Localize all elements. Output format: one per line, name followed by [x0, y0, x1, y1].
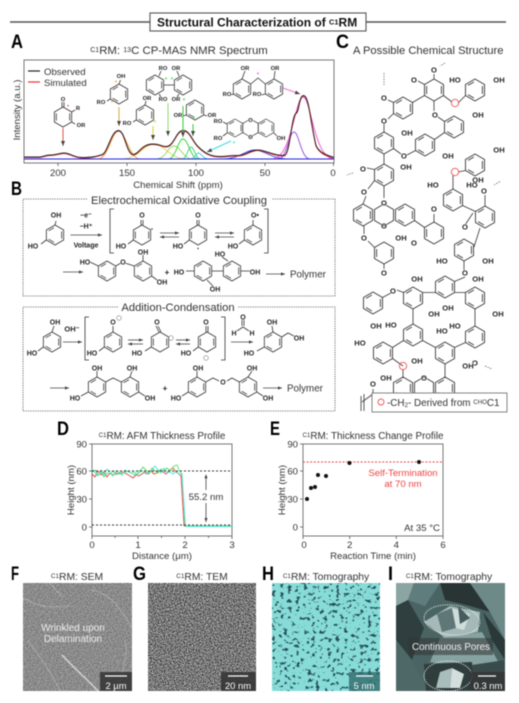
atom labels on the network: O	[370, 380, 376, 388]
scheme: addition-condensation: HO	[171, 396, 182, 402]
scheme: electrochemical oxidative coupling: Voltage	[74, 242, 98, 250]
panel label B: B	[11, 179, 22, 200]
molecule: aryl ether with arrow to 130 ppm: RO	[123, 121, 132, 127]
scale bar: 5 nm	[354, 680, 375, 691]
atom labels on the network: HO	[436, 326, 448, 336]
plot frame and axes: 50	[260, 168, 270, 179]
pore outlines	[423, 602, 481, 691]
plot frame and axes: Height (nm)	[277, 465, 288, 515]
molecule: aryl ether with arrow to 130 ppm: *	[154, 120, 157, 127]
molecule: dioxin with arrow to 98 ppm: RO	[214, 136, 223, 142]
molecule: diphenylmethane with arrow to 22 ppm: RO	[223, 92, 232, 98]
thickness annotation	[188, 475, 224, 522]
molecule: dioxin with arrow to 98 ppm: O	[248, 118, 253, 124]
atom labels on the network: OH	[442, 304, 454, 312]
overlay text: Continuous Pores	[412, 642, 490, 653]
polymer network skeleton	[347, 63, 501, 399]
scheme: electrochemical oxidative coupling: Electrochemical Oxidative Coupling	[91, 195, 267, 207]
plot frame and axes: 0	[330, 168, 336, 179]
molecule: biaryl with arrow to 115 ppm: RO	[159, 66, 168, 72]
plot frame and axes: 30	[76, 494, 87, 506]
scheme: electrochemical oxidative coupling: −H⁺	[80, 224, 93, 230]
scheme: addition-condensation	[23, 302, 335, 411]
panel C: chemical structure	[336, 32, 507, 412]
plot frame and axes: Distance (μm)	[132, 551, 192, 562]
molecule: biaryl with arrow to 115 ppm: OR	[172, 66, 181, 72]
scheme: electrochemical oxidative coupling: HO	[174, 270, 185, 276]
atom labels on the network: O	[421, 374, 427, 382]
atom labels on the network: O	[401, 152, 407, 160]
atom labels on the network: O	[431, 66, 437, 74]
molecule: dioxin with arrow to 98 ppm: RO	[214, 119, 223, 125]
annotation: self-termination: Self-Termination	[368, 468, 438, 479]
panel H: tomography slice	[262, 564, 380, 691]
plot frame and axes: 2	[347, 540, 352, 551]
atom labels on the network: HO	[427, 180, 439, 190]
atom labels on the network: O	[472, 358, 478, 368]
atom labels on the network: O	[432, 110, 438, 120]
scheme: electrochemical oxidative coupling: HO	[28, 244, 39, 250]
molecule: quinone with arrow to 197 ppm: O	[61, 97, 66, 103]
annotation: self-termination	[368, 468, 438, 490]
scheme: addition-condensation: HO	[181, 350, 192, 358]
TEM micrograph	[148, 583, 256, 691]
scheme: electrochemical oxidative coupling	[23, 195, 335, 296]
scheme: electrochemical oxidative coupling: O	[120, 260, 126, 266]
atom labels on the network: O	[360, 164, 366, 174]
plot frame and axes: Chemical Shift (ppm)	[133, 180, 223, 191]
scheme: addition-condensation: OH	[193, 366, 203, 372]
molecule: dioxin with arrow to 98 ppm	[207, 118, 285, 152]
molecule: diphenylmethane with arrow to 22 ppm	[223, 66, 300, 99]
plot frame and axes: Height (nm)	[66, 465, 77, 515]
atom labels on the network: OH	[493, 146, 505, 154]
plot frame and axes: Intensity (a.u.)	[12, 80, 23, 140]
overlay text	[41, 623, 105, 645]
scheme: electrochemical oxidative coupling: HO	[173, 244, 184, 250]
plot frame and axes	[66, 440, 235, 562]
scale bar: 0.3 nm	[474, 680, 503, 691]
scheme: addition-condensation: Polymer	[287, 384, 324, 394]
legend: -CH2- Derived from CHOC1	[387, 398, 500, 409]
molecule: resorcinol ether with arrows to 109 and 103 ppm: *	[183, 98, 186, 105]
panel label E: E	[270, 419, 280, 440]
height traces	[92, 465, 232, 526]
scheme: electrochemical oxidative coupling: HO	[116, 244, 127, 250]
molecule: aryl ether with arrow to 130 ppm	[123, 96, 157, 140]
atom labels on the network: OH	[493, 76, 505, 84]
spectrum legend	[28, 67, 87, 89]
panel label C: C	[336, 32, 349, 53]
atom labels on the network: O	[381, 198, 387, 208]
panel label H: H	[262, 564, 274, 585]
molecule: quinone with arrow to 197 ppm: R	[76, 106, 81, 112]
observed and simulated spectrum traces	[24, 96, 334, 158]
molecule: biaryl with arrow to 115 ppm: OR	[172, 97, 181, 103]
panel E heading: C1RM: Thickness Change Profile	[302, 431, 444, 442]
scheme: electrochemical oxidative coupling: OH	[138, 250, 148, 256]
atom labels on the network: OH	[411, 274, 423, 284]
plot frame and axes: 200	[50, 168, 66, 179]
overlay text: Wrinkled upon	[41, 623, 105, 634]
scheme: addition-condensation: OH	[267, 320, 277, 326]
atom labels on the network: OH	[370, 322, 382, 330]
scheme: addition-condensation: OH	[247, 366, 257, 372]
atom labels on the network: O	[462, 268, 468, 278]
molecule: quinone with arrow to 197 ppm	[54, 97, 86, 146]
atom labels on the network: O	[381, 268, 387, 278]
atom labels on the network: O	[411, 238, 417, 248]
atom labels on the network: OH	[472, 274, 484, 284]
scheme: electrochemical oxidative coupling: HO	[228, 244, 239, 250]
scheme: addition-condensation: O	[220, 380, 226, 386]
molecule: biaryl with arrow to 115 ppm: *	[165, 77, 168, 84]
panel E: thickness change profile	[270, 419, 446, 562]
molecule: diphenylmethane with arrow to 22 ppm: OR	[271, 66, 280, 72]
plot frame and axes: 60	[287, 466, 298, 478]
panel B: reaction schemes	[11, 179, 335, 411]
scheme: addition-condensation: H	[231, 330, 237, 338]
molecule: diphenylmethane with arrow to 22 ppm: *	[257, 72, 260, 79]
atom labels on the network: O	[381, 222, 387, 230]
atom labels on the network: OH	[411, 356, 423, 366]
plot frame and axes: 6	[440, 540, 446, 551]
atom labels on the network: HO	[449, 322, 461, 330]
atom labels on the network: OH	[472, 176, 484, 184]
reference levels	[92, 471, 232, 525]
scheme: electrochemical oxidative coupling: O•	[251, 212, 259, 220]
atom labels on the network: OH	[380, 374, 392, 382]
panel G heading: C1RM: TEM	[176, 572, 228, 583]
atom labels on the network: OH	[462, 362, 474, 370]
atom labels on the network: O	[381, 94, 387, 102]
scheme: addition-condensation: HO	[27, 350, 38, 358]
scheme: addition-condensation: OH	[145, 396, 155, 402]
scheme: addition-condensation: HO	[132, 350, 143, 358]
plot frame and axes: 1	[135, 540, 141, 551]
scheme: electrochemical oxidative coupling: −e⁻	[80, 212, 92, 220]
scheme: electrochemical oxidative coupling: OH	[157, 280, 167, 286]
molecule: resorcinol ether with arrows to 109 and 103 ppm: OR	[208, 113, 217, 119]
molecule: dioxin with arrow to 98 ppm: *	[233, 141, 236, 148]
molecule: biaryl with arrow to 115 ppm: *	[171, 77, 174, 84]
data points	[305, 460, 421, 501]
scheme: addition-condensation: +	[163, 384, 168, 393]
scheme: addition-condensation: O	[110, 320, 116, 326]
scheme: addition-condensation: OH	[127, 366, 137, 372]
molecule: phenol with arrow to 156 ppm: RO	[97, 100, 106, 106]
molecule: quinone with arrow to 197 ppm: OR	[77, 123, 86, 129]
panel label G: G	[133, 564, 146, 585]
panel A: NMR spectrum	[11, 32, 336, 191]
molecule: biaryl with arrow to 115 ppm	[146, 66, 192, 136]
panel G: TEM image	[133, 564, 256, 691]
scheme: addition-condensation: OH	[92, 366, 102, 372]
atom labels on the network: HO	[466, 180, 478, 190]
atom labels on the network: HO	[449, 76, 461, 84]
molecule: resorcinol ether with arrows to 109 and 103 ppm: *	[193, 116, 196, 123]
panel D: AFM thickness profile	[57, 419, 235, 562]
atom labels on the network: OH	[492, 310, 504, 318]
title: Structural Characterization of C1RM	[157, 16, 357, 30]
molecule: aryl ether with arrow to 130 ppm: OR	[143, 96, 152, 102]
plot frame and axes	[277, 440, 446, 562]
plot frame and axes: 30	[287, 494, 298, 506]
atom labels on the network: OH	[401, 128, 413, 138]
vinyl fragment at the lower edge	[361, 389, 373, 411]
scheme: electrochemical oxidative coupling: OH	[250, 270, 260, 276]
scale bar: 2 µm	[105, 680, 127, 691]
molecule: dioxin with arrow to 98 ppm: OH	[277, 136, 285, 142]
atom labels on the network: OH	[395, 234, 407, 242]
plot frame and axes: 0	[82, 522, 87, 534]
plot frame and axes: 2	[182, 540, 188, 551]
panel H heading: C1RM: Tomography	[283, 572, 370, 583]
panel I: tomography pore rendering	[388, 564, 505, 691]
plot frame and axes: 90	[76, 440, 87, 450]
scheme: electrochemical oxidative coupling: HO	[80, 260, 91, 266]
plot frame and axes: 0	[89, 540, 95, 551]
scheme: electrochemical oxidative coupling: O	[195, 212, 201, 220]
atom labels on the network: O	[361, 234, 367, 242]
scheme: addition-condensation: OH	[263, 396, 273, 402]
scheme: addition-condensation: O	[203, 320, 209, 326]
plot frame and axes: 3	[229, 540, 235, 551]
atom labels on the network: O	[462, 222, 468, 232]
molecule: diphenylmethane with arrow to 22 ppm: OR	[241, 66, 250, 72]
molecule: resorcinol ether with arrows to 109 and 103 ppm: OR	[174, 113, 183, 119]
3D pore render	[396, 583, 505, 691]
scheme: electrochemical oxidative coupling: Polymer	[290, 270, 327, 280]
scheme: addition-condensation: H	[249, 330, 255, 338]
scheme: electrochemical oxidative coupling: OH	[51, 212, 61, 220]
annotation: self-termination: at 70 nm	[384, 479, 422, 490]
atom labels on the network: OH	[400, 162, 412, 172]
title	[10, 13, 506, 31]
panel I heading: C1RM: Tomography	[406, 572, 493, 583]
molecule: dioxin with arrow to 98 ppm: O	[248, 135, 253, 141]
scheme: addition-condensation: OH	[50, 320, 60, 326]
atom labels on the network: O	[361, 188, 367, 196]
scheme: electrochemical oxidative coupling: OH	[210, 286, 220, 294]
SEM micrograph	[23, 583, 132, 691]
plot frame and axes: 4	[394, 540, 400, 551]
scheme: electrochemical oxidative coupling: O	[139, 212, 145, 220]
tomography image	[272, 583, 380, 691]
scheme: addition-condensation: O	[240, 314, 246, 322]
scheme: addition-condensation: HO	[70, 396, 81, 402]
panel F: SEM image	[11, 564, 132, 691]
plot frame and axes: 100	[188, 168, 204, 179]
atom labels on the network: HO	[354, 338, 366, 348]
scheme: electrochemical oxidative coupling: +	[165, 268, 170, 277]
molecule: phenol with arrow to 156 ppm: *	[111, 100, 114, 107]
atom labels on the network: OH	[472, 110, 484, 120]
atom labels on the network: HO	[436, 256, 448, 266]
red markers for -CH2- positions	[399, 99, 459, 370]
panel label D: D	[57, 419, 69, 440]
panel label A: A	[11, 32, 23, 53]
spectrum legend: Simulated	[44, 78, 87, 89]
atom labels on the network	[354, 66, 505, 388]
atom labels on the network: HO	[385, 320, 397, 330]
plot frame and axes: Reaction Time (min)	[330, 551, 416, 562]
plot frame and axes: 0	[301, 540, 307, 551]
molecule: phenol with arrow to 156 ppm: *	[115, 80, 118, 87]
atom labels on the network: O	[381, 116, 387, 126]
scheme: addition-condensation: Addition-Condensation	[121, 302, 235, 314]
atom labels on the network: OH	[442, 152, 454, 160]
panel D heading: C1RM: AFM Thickness Profile	[99, 431, 226, 442]
panel C heading: A Possible Chemical Structure	[353, 45, 503, 57]
self-termination line	[303, 461, 443, 463]
atom labels on the network: OH	[428, 310, 440, 318]
panel F heading: C1RM: SEM	[51, 572, 103, 583]
plot frame and axes: 60	[76, 466, 87, 478]
molecule: phenol with arrow to 156 ppm: OH	[117, 74, 125, 80]
scale bar: 20 nm	[225, 680, 251, 691]
plot frame and axes: 90	[287, 440, 298, 450]
atom labels on the network: O	[481, 186, 487, 196]
atom labels on the network: OH	[482, 256, 494, 266]
overlay text: Delamination	[44, 634, 102, 645]
plot frame and axes	[12, 60, 336, 191]
thickness annotation: 55.2 nm	[189, 492, 223, 503]
scheme: addition-condensation: OH⁻	[64, 324, 80, 334]
fitted component curves	[24, 97, 334, 159]
scheme: addition-condensation: O	[154, 320, 160, 326]
legend	[372, 393, 507, 412]
atom labels on the network: O	[411, 76, 417, 84]
atom labels on the network: O	[390, 286, 396, 296]
spectrum legend: Observed	[44, 67, 86, 78]
scheme: addition-condensation: OH	[294, 336, 304, 342]
molecule: diphenylmethane with arrow to 22 ppm: RO	[253, 92, 262, 98]
molecule: phenol with arrow to 156 ppm	[97, 74, 128, 126]
scheme: electrochemical oxidative coupling: HO	[215, 252, 226, 258]
plot frame and axes: 150	[119, 168, 135, 179]
annotation: temperature: At 35 °C	[404, 523, 440, 534]
molecule: resorcinol ether with arrows to 109 and 103 ppm	[174, 98, 217, 137]
panel label I: I	[388, 564, 393, 585]
panel A heading: C1RM: 13C CP-MAS NMR Spectrum	[90, 45, 268, 57]
molecule: biaryl with arrow to 115 ppm: RO	[159, 97, 168, 103]
plot frame and axes: 0	[293, 522, 298, 534]
scheme: addition-condensation: HO	[87, 350, 98, 358]
panel label F: F	[11, 564, 19, 585]
scheme: addition-condensation: HO	[244, 350, 255, 358]
molecule: quinone with arrow to 197 ppm: *	[67, 105, 70, 111]
atom labels on the network: O	[431, 204, 437, 214]
